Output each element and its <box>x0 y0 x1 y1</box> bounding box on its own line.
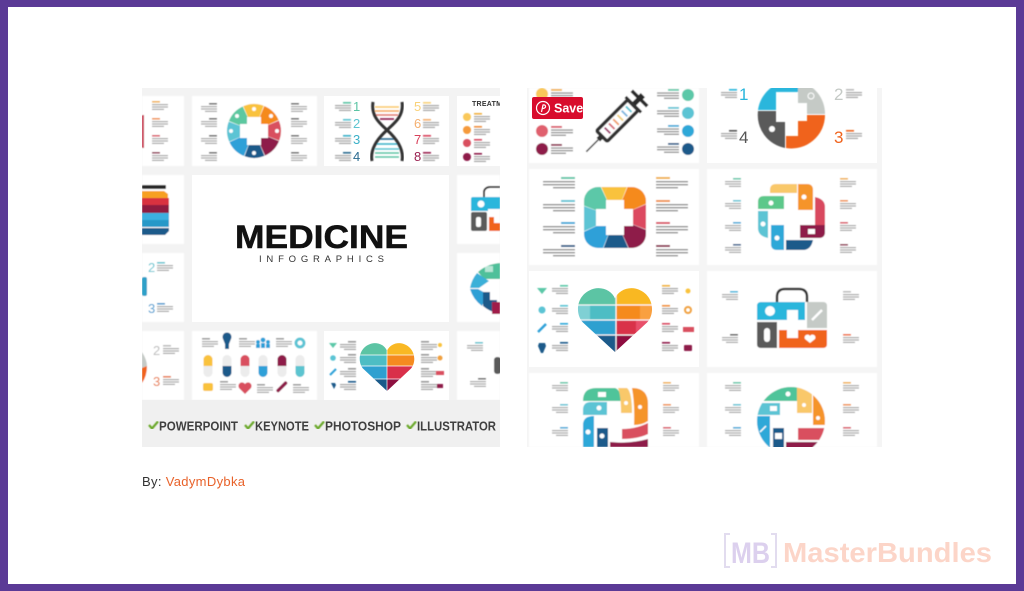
right preview image <box>527 81 882 456</box>
format names: ILLUSTRATOR <box>417 420 496 434</box>
DNA numbers: 8 <box>414 149 421 164</box>
DNA numbers: 7 <box>414 132 421 147</box>
chart: small heart <box>358 342 416 392</box>
format names: KEYNOTE <box>255 420 309 434</box>
panel: treatment slide partial: TREATM <box>472 101 502 108</box>
panel: circular ribbon slide <box>707 373 877 456</box>
format names <box>160 422 496 430</box>
big numbers: 4 <box>739 128 748 147</box>
panel: heart slide <box>324 331 449 400</box>
panel: row 3 numbers partial <box>142 253 184 322</box>
panel: large heart slide <box>529 271 699 367</box>
byline: By: VadymDybka <box>142 474 246 489</box>
left preview image <box>142 88 502 447</box>
chart: four part circle <box>758 81 825 148</box>
panel: octagon cross slide <box>529 169 699 265</box>
watermark wordmark: MasterBundles <box>783 537 992 568</box>
DNA numbers: 4 <box>353 149 360 164</box>
panel: rounded square ribbon slide <box>529 373 699 447</box>
big numbers: 3 <box>834 128 843 147</box>
big numbers <box>739 88 843 143</box>
title: MEDICINE <box>235 219 408 255</box>
panel: pills and icons slide <box>192 331 317 400</box>
chart: large heart <box>576 287 654 353</box>
pills row <box>204 355 304 377</box>
panel: circle partial <box>457 253 500 322</box>
panel: stacked pill partial <box>142 175 184 244</box>
chart: ribbon cross <box>758 184 825 250</box>
watermark logo: MB <box>731 537 770 570</box>
panel: row 1 partial pen slide <box>142 96 184 166</box>
icon: syringe <box>585 89 649 153</box>
big numbers: 1 <box>739 85 748 104</box>
panel: DNA slide <box>324 96 449 166</box>
DNA numbers: 5 <box>414 99 421 114</box>
icon: pinterest <box>536 102 550 114</box>
panel: row 4 numbers partial: 3 <box>153 374 160 389</box>
pinterest save button <box>532 97 583 119</box>
DNA numbers: 2 <box>353 116 360 131</box>
pinterest save button: Save <box>554 102 583 116</box>
panel: row 3 numbers partial: 3 <box>148 301 155 316</box>
panel: four part circle slide <box>707 81 877 163</box>
icon: check marks <box>149 422 416 428</box>
panel: row 4 numbers partial <box>142 331 184 400</box>
panel: row 3 numbers partial: 2 <box>148 260 155 275</box>
watermark: MasterBundles <box>724 533 992 570</box>
panel: syringe slide <box>529 87 699 163</box>
DNA numbers: 1 <box>353 99 360 114</box>
format names: POWERPOINT <box>159 420 238 434</box>
panel: row 4 numbers partial: 2 <box>153 343 160 358</box>
subtitle: INFOGRAPHICS <box>259 254 384 265</box>
formats strip <box>148 421 496 430</box>
panel: main title slide <box>192 175 449 322</box>
icon: medical bag <box>757 289 827 348</box>
icon: DNA helix <box>372 102 402 161</box>
chart: rounded square ribbon <box>583 388 648 447</box>
panel: medical bag slide <box>707 271 877 367</box>
panel: treatment slide partial <box>457 96 502 166</box>
DNA numbers <box>353 99 421 164</box>
chart: octagon cross <box>586 188 644 247</box>
panel: ribbon cross slide <box>707 169 877 265</box>
format names: PHOTOSHOP <box>325 420 401 434</box>
big numbers: 2 <box>834 85 843 104</box>
panel: row 4 right partial <box>457 331 501 400</box>
panel: medical ring slide <box>192 96 317 166</box>
chart: circular ribbon <box>757 387 826 456</box>
DNA numbers: 3 <box>353 132 360 147</box>
DNA numbers: 6 <box>414 116 421 131</box>
panel: medical bag partial <box>457 175 500 244</box>
